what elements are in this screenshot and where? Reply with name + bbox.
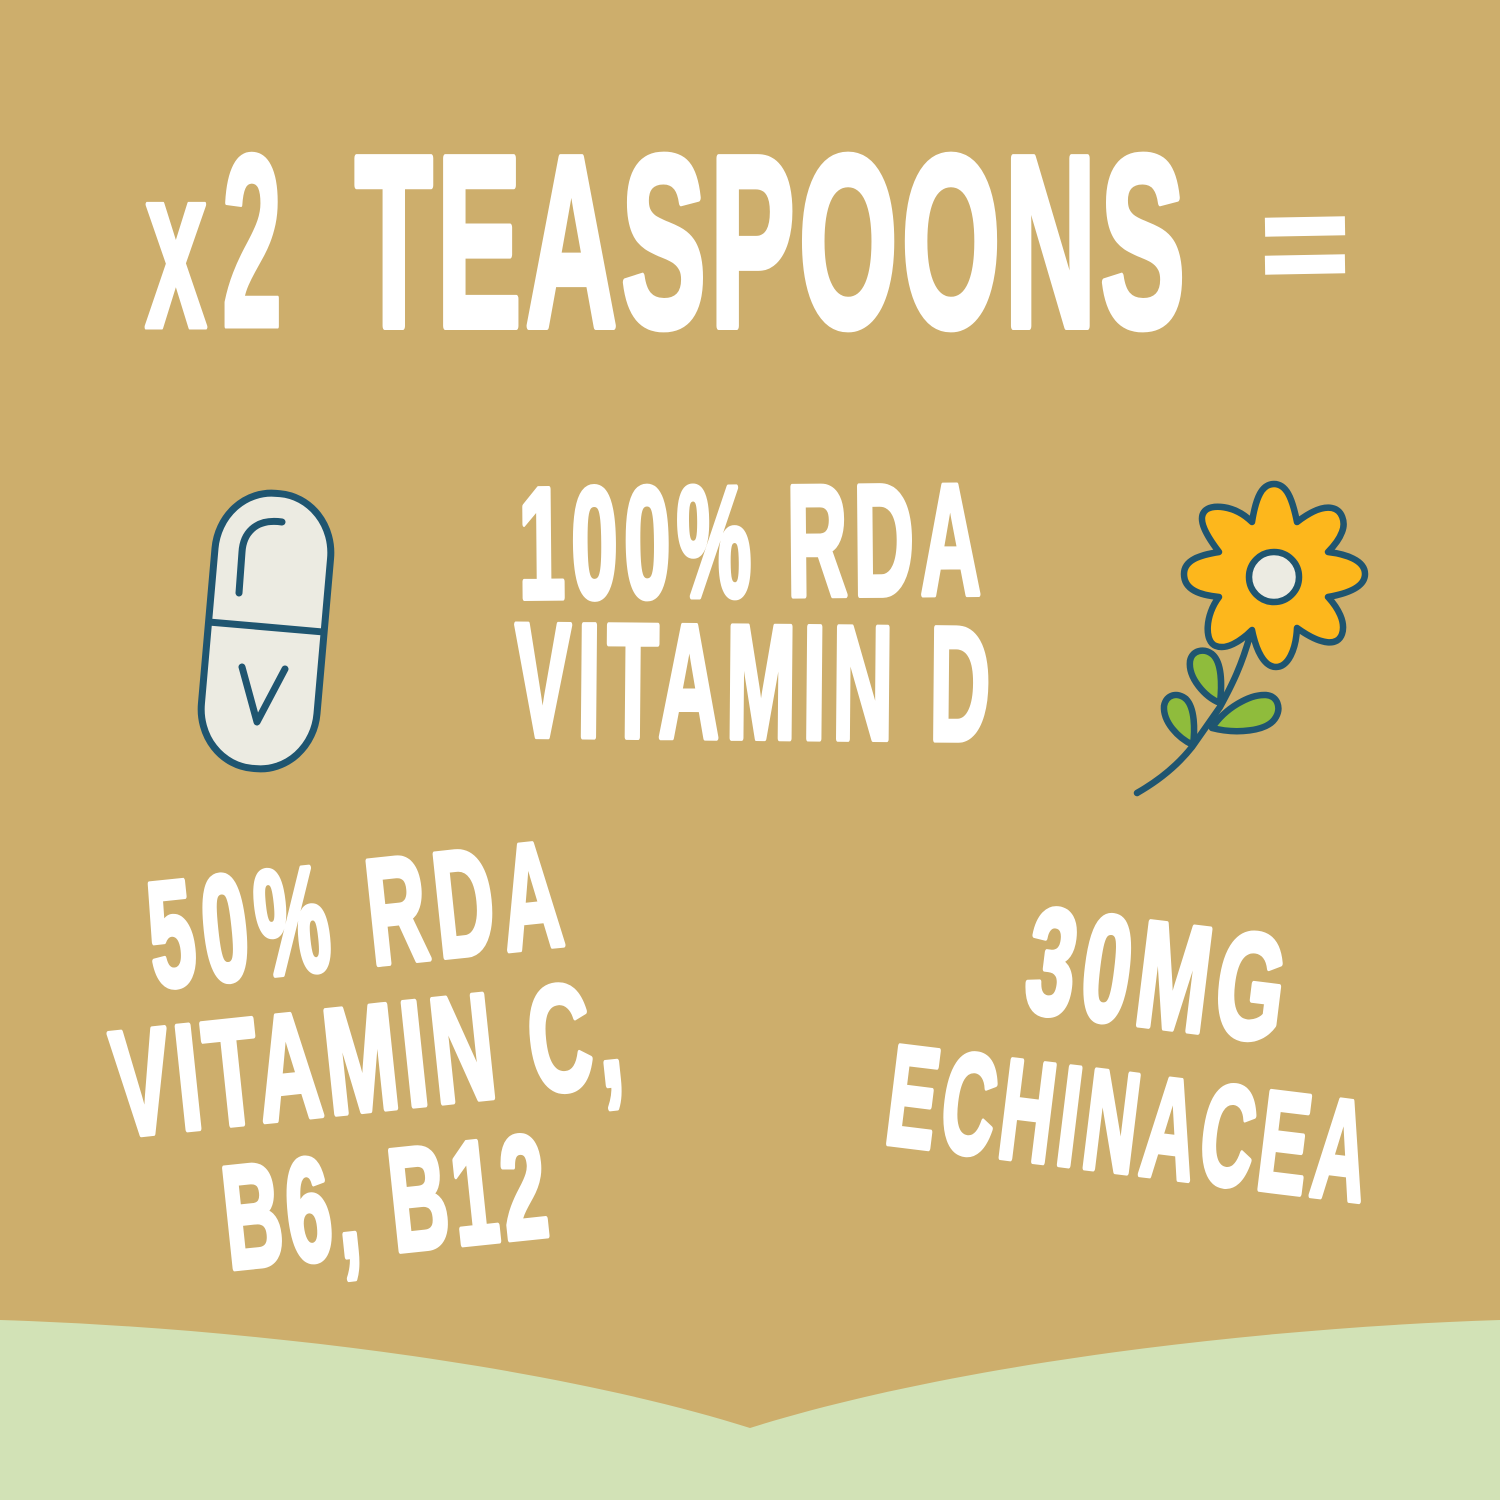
title xyxy=(145,105,1345,379)
icon: vitamin capsule xyxy=(196,488,336,774)
text: 50% RDA Vitamin C, B6, B12 xyxy=(104,809,629,1300)
text: 100% RDA Vitamin D: VITAMIN D xyxy=(514,590,991,775)
text: 30mg Echinacea: 30MG xyxy=(1018,875,1295,1073)
title: TEASPOONS xyxy=(355,106,1185,379)
text: 30mg Echinacea: ECHINACEA xyxy=(879,1016,1377,1231)
green wave footer xyxy=(0,1320,1500,1500)
title: x xyxy=(145,117,207,377)
text: 100% RDA Vitamin D: 100% RDA xyxy=(518,452,981,632)
text: 50% RDA Vitamin C, B6, B12: 50% RDA xyxy=(140,809,569,1020)
text: 30mg Echinacea xyxy=(879,875,1377,1231)
icon: echinacea flower xyxy=(1137,484,1365,793)
text: 100% RDA Vitamin D xyxy=(514,452,991,775)
title: 2 xyxy=(222,105,282,379)
text: 50% RDA Vitamin C, B6, B12: B6, B12 xyxy=(215,1103,554,1300)
text: 50% RDA Vitamin C, B6, B12: VITAMIN C, xyxy=(104,948,629,1168)
